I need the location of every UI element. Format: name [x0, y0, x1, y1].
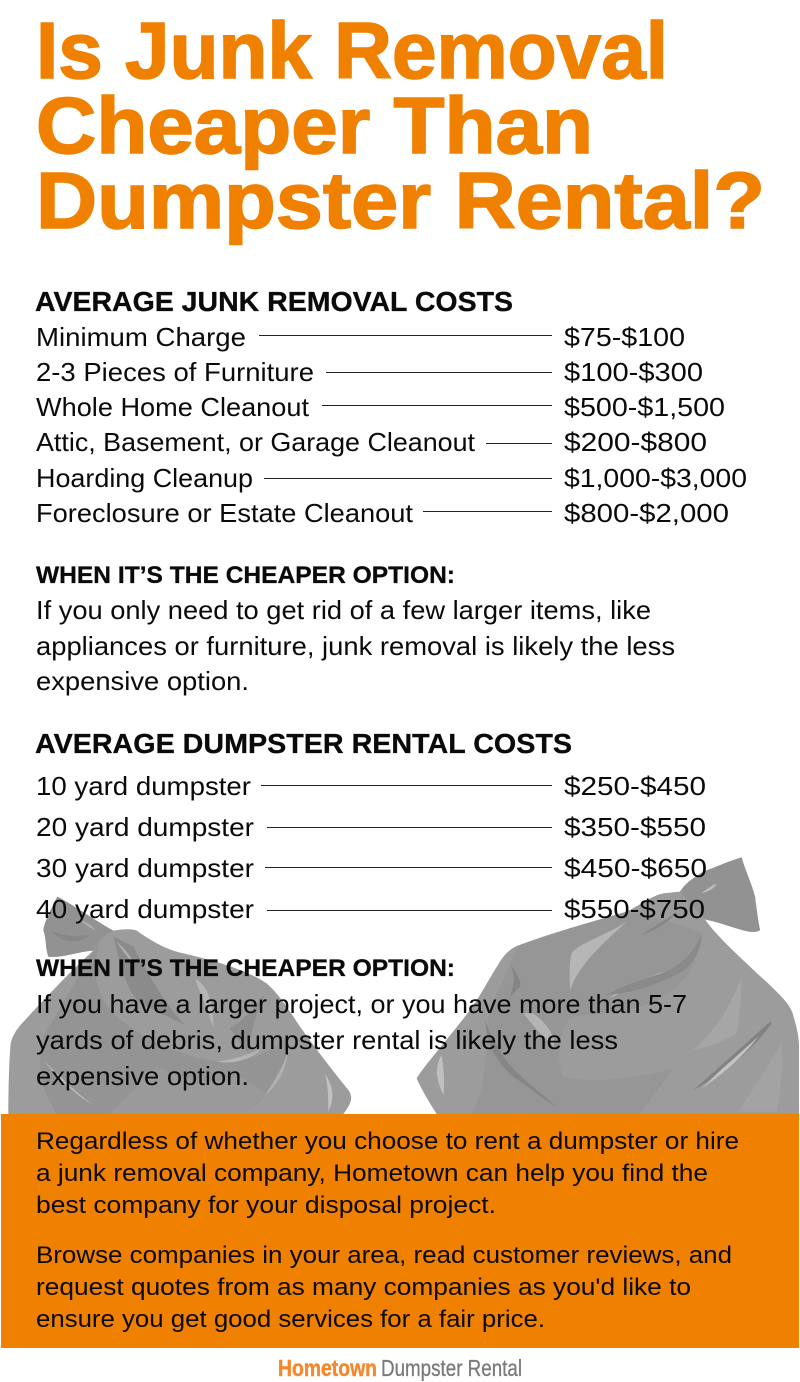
title [36, 6, 765, 245]
text block: when junk removal is cheaper: appliances or furniture, junk removal is likely the less [36, 631, 675, 661]
title: Dumpster Rental? [36, 156, 765, 245]
table: junk removal costs: 2-3 Pieces of Furniture [36, 357, 314, 387]
table: junk removal costs: $75-$100 [564, 322, 685, 352]
table: dumpster rental costs: 30 yard dumpster [36, 853, 254, 883]
table: junk removal costs [36, 322, 747, 528]
text block: when dumpster rental is cheaper: expensive option. [36, 1061, 249, 1091]
text block: when junk removal is cheaper: WHEN IT’S THE CHEAPER OPTION: [36, 562, 455, 589]
heading: average dumpster rental costs: AVERAGE DUMPSTER RENTAL COSTS [35, 728, 572, 759]
text block: when junk removal is cheaper [36, 562, 675, 696]
panel: orange call to action: best company for your disposal project. [36, 1192, 496, 1219]
text block: when dumpster rental is cheaper: WHEN IT’S THE CHEAPER OPTION: [36, 955, 455, 982]
panel: orange call to action: Browse companies in your area, read customer reviews, and [36, 1242, 732, 1269]
panel: orange call to action: ensure you get good services for a fair price. [36, 1306, 545, 1333]
table: junk removal costs: Foreclosure or Estate Cleanout [36, 498, 414, 528]
table: junk removal costs: $100-$300 [564, 357, 703, 387]
table: dumpster rental costs: $450-$650 [564, 853, 707, 883]
table: dumpster rental costs: $250-$450 [564, 771, 706, 801]
panel: orange call to action [1, 1114, 799, 1348]
panel: orange call to action: request quotes from as many companies as you'd like to [36, 1274, 691, 1301]
table: junk removal costs: $1,000-$3,000 [564, 463, 747, 493]
text block: when junk removal is cheaper: expensive option. [36, 666, 249, 696]
logo: Hometown Dumpster Rental [278, 1355, 522, 1381]
table: junk removal costs: $200-$800 [564, 427, 707, 457]
table: dumpster rental costs: $350-$550 [564, 812, 706, 842]
table: dumpster rental costs: 20 yard dumpster [36, 812, 254, 842]
icon: left trash bag [8, 897, 351, 1114]
table: dumpster rental costs [36, 771, 707, 924]
table: junk removal costs: $800-$2,000 [564, 498, 729, 528]
table: junk removal costs: $500-$1,500 [564, 392, 725, 422]
panel: orange call to action: a junk removal company, Hometown can help you find the [36, 1160, 708, 1187]
text block: when dumpster rental is cheaper [36, 955, 687, 1091]
table: junk removal costs: Hoarding Cleanup [36, 463, 253, 493]
title: Is Junk Removal [36, 6, 668, 95]
icon: right trash bag [417, 857, 799, 1114]
heading: average junk removal costs: AVERAGE JUNK REMOVAL COSTS [35, 286, 513, 317]
text block: when dumpster rental is cheaper: If you have a larger project, or you have more than 5-7 [36, 989, 687, 1019]
table: dumpster rental costs: 10 yard dumpster [36, 771, 251, 801]
table: junk removal costs: Attic, Basement, or Garage Cleanout [36, 427, 476, 457]
panel: orange call to action: Regardless of whether you choose to rent a dumpster or hire [36, 1128, 739, 1155]
title: Cheaper Than [36, 81, 593, 170]
table: junk removal costs: Minimum Charge [36, 322, 246, 352]
table: dumpster rental costs: 40 yard dumpster [36, 894, 254, 924]
logo: Hometown Dumpster Rental: Hometown [278, 1355, 377, 1381]
logo: Hometown Dumpster Rental: Dumpster Rental [381, 1355, 522, 1381]
text block: when junk removal is cheaper: If you only need to get rid of a few larger items, like [36, 595, 651, 625]
table: junk removal costs: Whole Home Cleanout [36, 392, 310, 422]
text block: when dumpster rental is cheaper: yards of debris, dumpster rental is likely the less [36, 1025, 618, 1055]
table: dumpster rental costs: $550-$750 [564, 894, 705, 924]
